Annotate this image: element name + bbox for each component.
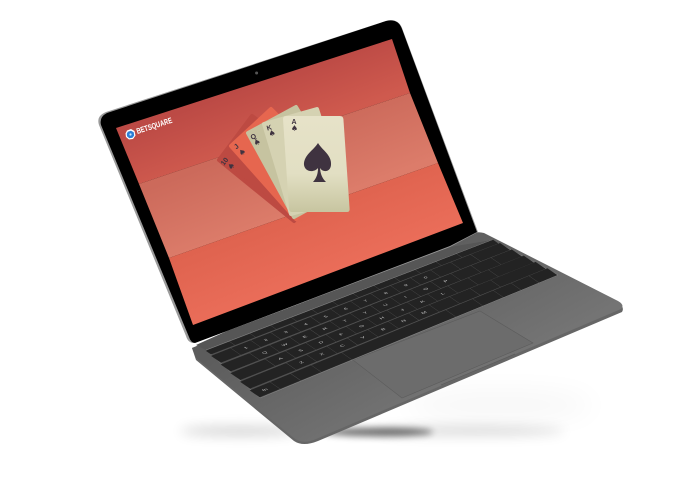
number key row [212,243,509,362]
space bar row: fn [261,388,270,392]
home key row: A [277,357,285,361]
logo wordmark: BETSQUARE [135,116,174,136]
function key row [206,240,498,354]
shift key row: N [400,319,408,323]
keyboard [206,240,558,398]
screen wallpaper top band [116,39,410,184]
home key row: G [358,324,366,328]
qwerty key row: R [322,327,330,331]
home key row: K [419,300,427,304]
home key row: H [378,316,387,320]
card: ten of spades: 10 [220,157,230,167]
camera [255,72,258,74]
space bar row [250,269,557,397]
icon: logo octagon [126,129,136,140]
shift key row [241,262,545,388]
number key row: 9 [403,284,410,287]
card: ten of spades [219,116,327,221]
trackpad [353,311,533,398]
qwerty key row: E [302,335,310,339]
qwerty key row: O [422,287,430,291]
screen wallpaper middle band [139,93,438,258]
number key row: 7 [363,299,370,303]
icon: large spade [304,143,331,182]
shift key row: Z [298,361,305,365]
home key row [231,256,533,380]
qwerty key row: I [403,296,409,299]
qwerty key row: Y [362,311,370,315]
qwerty key row: Q [261,351,269,355]
shift key row: X [319,352,327,356]
card: queen of spades: Q [250,133,258,142]
shift key row: M [420,311,429,315]
number key row: 5 [323,315,330,319]
qwerty key row: U [382,303,390,307]
card: jack of spades: J [233,143,241,151]
qwerty key row: W [281,342,290,347]
qwerty key row: T [342,319,349,323]
number key row: 3 [283,330,290,334]
shift key row: V [360,335,368,340]
card: ace of spades: A [291,119,297,126]
number key row: 1 [243,346,250,350]
card: king of spades: ♠ [267,128,277,139]
card: jack of spades [231,109,338,219]
card: queen of spades: ♠ [252,137,263,148]
hinge strip [196,240,492,350]
number key row: 6 [343,307,350,311]
trackpad front notch [441,354,515,385]
shift key row: B [380,327,388,331]
card: queen of spades [248,107,345,217]
playing cards [219,107,350,221]
laptop lid [98,20,478,343]
logo: betsquare [126,116,174,140]
card: king of spades: K [266,124,273,133]
home key row: J [399,308,406,312]
card: king of spades [264,109,346,214]
home key row: D [318,340,326,345]
shift key row: C [339,344,347,348]
number key row: 0 [423,276,430,280]
screen wallpaper lower band [169,163,463,325]
qwerty key row: P [443,279,450,283]
card: jack of spades: ♠ [237,147,248,158]
card: ace of spades: ♠ [291,124,298,133]
number key row: 8 [383,291,390,295]
number key row: 4 [303,323,310,326]
laptop base [192,232,623,444]
number key row: 2 [263,338,270,342]
qwerty key row [221,250,521,371]
home key row: L [440,292,447,296]
card: ace of spades [283,116,350,212]
home key row: S [297,348,306,353]
card: ten of spades: ♠ [226,161,237,172]
home key row: F [338,333,345,336]
ground shadow [180,391,595,436]
